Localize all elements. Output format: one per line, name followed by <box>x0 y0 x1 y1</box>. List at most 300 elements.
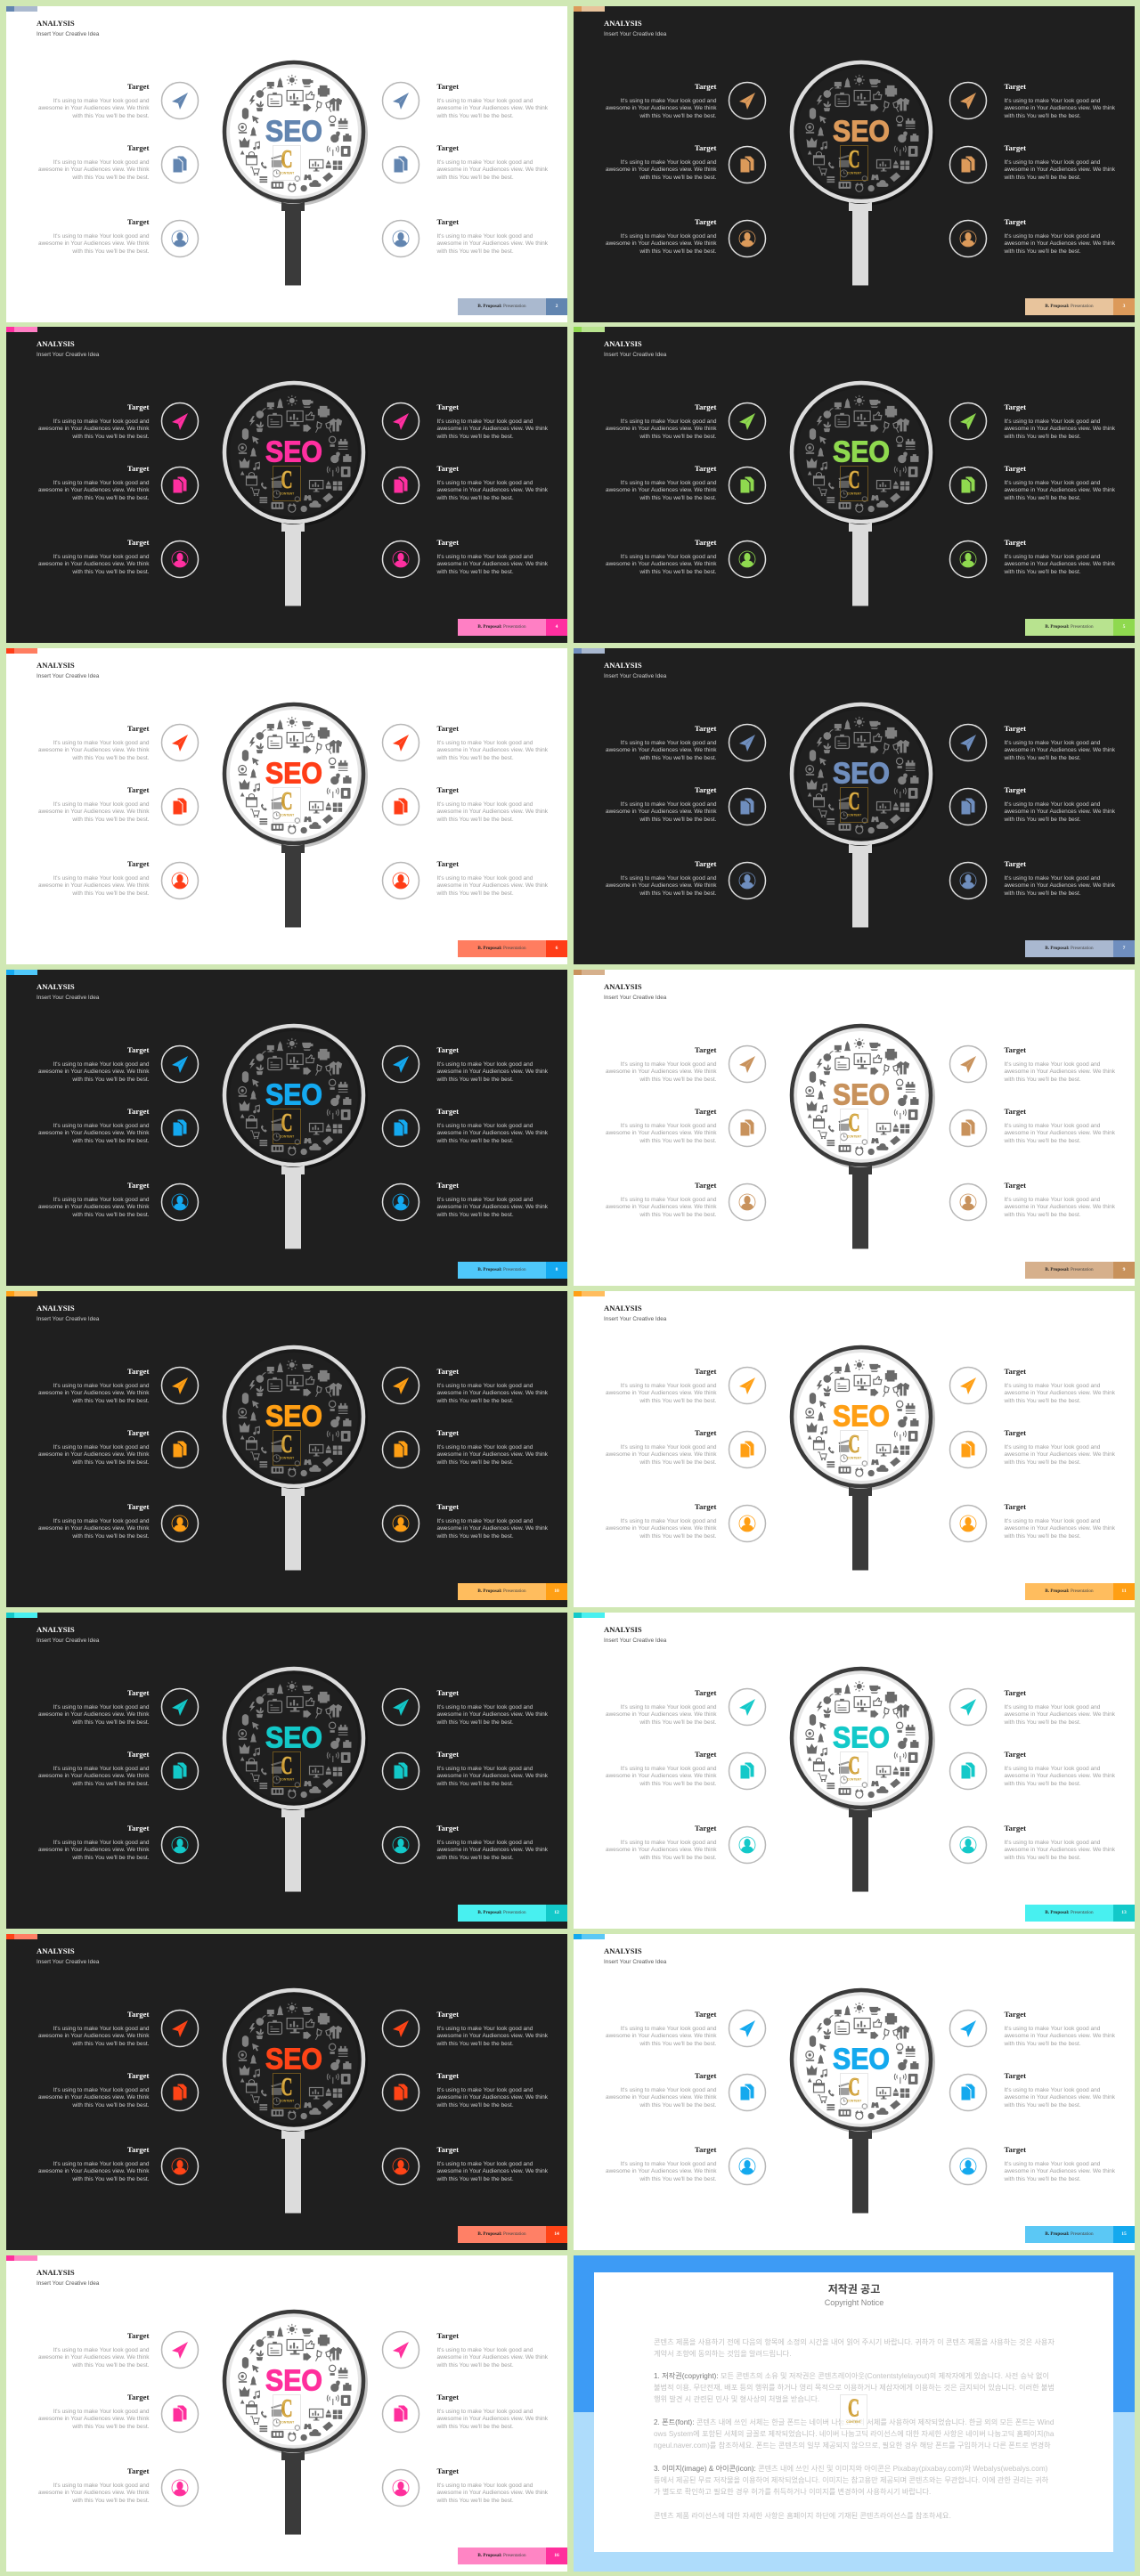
footer: 2 <box>556 304 558 309</box>
text: target left 1: awesome in Your Audiences view. We think <box>38 2033 150 2039</box>
text: target left 2: with this You we'll be the best. <box>72 2102 150 2109</box>
text: target right 2: Target <box>436 2393 459 2401</box>
text: target left 2: with this You we'll be the best. <box>639 495 716 501</box>
text: target left 3 <box>604 858 716 898</box>
heading: ANALYSIS <box>604 1946 642 1955</box>
magnifier with SEO: C <box>281 2395 292 2423</box>
magnifier with SEO: CONTENT <box>280 171 295 175</box>
text: target left 2: with this You we'll be the best. <box>72 1138 150 1144</box>
copyright clause 1: 1. 저작권(copyright): 모든 콘텐츠의 소유 및 저작권은 콘텐츠레이아웃(Contentstylelayout)의 제작자에게 있습니다. 사전 승낙 없이 불법적 이용, 무단전재, 배포 등의 행위를 하거나 영리 목적으로 이용하거나 제삼자에게 이용하는 것은 금지되어 있습니다. 이러한 불법 행위 발견 시 관련된 민사 및 형사상의 처벌을 받습니다. <box>654 2372 1054 2402</box>
icon: plane right <box>380 2329 421 2370</box>
text: target right 1 <box>436 2330 558 2369</box>
panel: slide 7 dark slate <box>574 648 1135 964</box>
text: target right 1: with this You we'll be the best. <box>436 1398 514 1403</box>
text: target right 2 <box>1005 784 1126 824</box>
text: target left 1: awesome in Your Audiences view. We think <box>38 2354 150 2361</box>
text: target right 3 <box>1005 1823 1126 1862</box>
text: target right 1: with this You we'll be the best. <box>1005 2041 1081 2046</box>
text: target left 2: Target <box>695 464 716 473</box>
text: target left 1: with this You we'll be the best. <box>72 2361 150 2369</box>
heading: ANALYSIS <box>604 1304 642 1312</box>
icon: person left <box>159 1503 200 1544</box>
text: target left 2: Target <box>695 2071 716 2080</box>
text: target right 2: with this You we'll be the best. <box>436 2424 514 2430</box>
text: target right 3: with this You we'll be the best. <box>1005 248 1081 255</box>
text: target right 1: It's using to make Your look good and <box>436 98 533 103</box>
text: target right 1 <box>1005 402 1126 441</box>
footer: B. Proposal: Presentation <box>477 304 526 309</box>
text: target right 1 <box>436 723 558 762</box>
text: target right 3: Target <box>436 1502 459 1511</box>
text: target left 1: It's using to make Your look good and <box>53 739 150 746</box>
text: target left 3 <box>37 858 150 898</box>
text: target right 1: Target <box>1005 724 1026 733</box>
text: target left 2: It's using to make Your look good and <box>621 1766 716 1772</box>
text: target right 3: with this You we'll be the best. <box>1005 1533 1081 1539</box>
icon: documents right <box>948 2072 989 2113</box>
magnifier with SEO: SEO <box>265 1077 322 1110</box>
magnifier with SEO: CONTENT <box>280 492 295 495</box>
icon: documents left <box>727 1751 768 1792</box>
text: target left 3: awesome in Your Audiences view. We think <box>606 561 716 567</box>
text: target right 1: awesome in Your Audiences view. We think <box>436 1711 548 1718</box>
text: target left 1 <box>606 82 716 119</box>
icon: plane left <box>159 722 200 763</box>
magnifier with SEO: C <box>848 788 860 816</box>
text: target right 2: with this You we'll be the best. <box>436 817 514 823</box>
footer <box>458 619 567 636</box>
text: target right 1 <box>436 1366 558 1405</box>
text: target left 1: Target <box>695 402 716 411</box>
text: target right 2: It's using to make Your look good and <box>436 1123 533 1129</box>
icon: person right <box>380 2467 421 2508</box>
icon: documents right <box>380 1429 421 1470</box>
text: target left 3: with this You we'll be the best. <box>72 1854 150 1861</box>
text: target left 1: It's using to make Your look good and <box>53 1382 150 1389</box>
text: target right 3: Target <box>1005 217 1026 226</box>
text: target right 1: with this You we'll be the best. <box>1005 433 1081 440</box>
text: target right 3: It's using to make Your look good and <box>436 2160 533 2167</box>
text: target right 3: It's using to make Your look good and <box>436 1517 533 1524</box>
icon: plane left <box>727 722 768 763</box>
icon: documents left <box>729 146 766 183</box>
icon: plane right <box>380 722 421 763</box>
text: target right 2: awesome in Your Audiences view. We think <box>436 1773 548 1779</box>
text: target right 1: awesome in Your Audiences view. We think <box>436 1390 548 1396</box>
footer <box>458 1262 567 1279</box>
text: target right 3: It's using to make Your look good and <box>1005 1840 1100 1845</box>
text: target right 2: Target <box>436 1750 459 1759</box>
text: target right 3: It's using to make Your look good and <box>1005 1197 1100 1202</box>
text: target right 1: with this You we'll be the best. <box>436 1076 514 1083</box>
text: target left 3: Target <box>695 1824 716 1832</box>
text: target left 2 <box>604 2070 716 2109</box>
text: target left 3: awesome in Your Audiences view. We think <box>606 240 716 247</box>
text: target left 1: It's using to make Your look good and <box>621 2025 716 2032</box>
text: target left 2: awesome in Your Audiences view. We think <box>38 1130 150 1136</box>
icon: plane right <box>948 401 989 442</box>
footer: 12 <box>554 1910 559 1915</box>
text: target left 1: It's using to make Your look good and <box>621 739 716 746</box>
text: target left 3: It's using to make Your look good and <box>53 233 150 239</box>
text: target right 2: It's using to make Your look good and <box>436 1766 533 1772</box>
text: target right 2: It's using to make Your look good and <box>436 1444 533 1451</box>
icon: documents right <box>380 2393 421 2434</box>
text: target left 3: Target <box>127 1824 150 1832</box>
magnifier with SEO: SEO <box>265 756 322 789</box>
text: target right 3 <box>1005 217 1115 255</box>
text: target left 1 <box>606 402 716 440</box>
text: target left 3: It's using to make Your look good and <box>621 233 716 239</box>
footer <box>1024 1583 1135 1600</box>
text: target right 1: Target <box>436 1045 459 1054</box>
text: target right 3: awesome in Your Audiences view. We think <box>436 1204 548 1210</box>
text: target right 2: awesome in Your Audiences view. We think <box>1005 809 1115 815</box>
text: target left 3 <box>37 2466 150 2505</box>
text: target right 3: with this You we'll be the best. <box>436 248 514 255</box>
icon: person right <box>380 2146 421 2187</box>
text: target right 2: Target <box>1005 143 1026 152</box>
icon: documents left <box>159 1751 200 1792</box>
text: target left 1: Target <box>695 1367 716 1376</box>
icon: person left <box>727 1182 768 1223</box>
text: target left 1 <box>604 723 716 762</box>
text: target right 3: It's using to make Your look good and <box>436 2483 533 2488</box>
magnifier with SEO <box>223 61 368 285</box>
text: target right 2 <box>436 464 548 501</box>
text: target right 1: Target <box>1005 82 1026 91</box>
text: target right 3: awesome in Your Audiences view. We think <box>1005 561 1115 567</box>
text: target right 1 <box>1005 1366 1126 1405</box>
icon: documents left <box>160 467 200 504</box>
icon: person left <box>159 2467 200 2508</box>
text: target left 1: with this You we'll be the best. <box>72 112 150 119</box>
text: target left 3: awesome in Your Audiences view. We think <box>606 882 716 889</box>
footer: B. Proposal: Presentation <box>477 1589 526 1594</box>
text: target right 1 <box>1005 1687 1126 1727</box>
text: target left 1: awesome in Your Audiences view. We think <box>38 426 150 432</box>
text: target left 2: awesome in Your Audiences view. We think <box>38 167 150 173</box>
text: target right 2: awesome in Your Audiences view. We think <box>436 2416 548 2422</box>
magnifier with SEO <box>784 1341 940 1574</box>
heading: ANALYSIS <box>37 661 75 670</box>
text: target right 1 <box>1005 1044 1126 1084</box>
text: target right 1: with this You we'll be the best. <box>436 2361 514 2369</box>
text: target right 1: Target <box>436 1367 459 1376</box>
text: target right 2: with this You we'll be the best. <box>1005 2102 1081 2109</box>
subtitle: Insert Your Creative Idea <box>37 1959 99 1964</box>
text: target right 1: awesome in Your Audiences view. We think <box>436 747 548 753</box>
icon: plane left <box>159 1686 200 1727</box>
text: target left 1: It's using to make Your look good and <box>53 98 150 103</box>
text: target left 3 <box>38 538 150 575</box>
text: target right 2: It's using to make Your look good and <box>1005 480 1100 486</box>
text: target left 1: with this You we'll be the best. <box>639 433 716 440</box>
text: target right 2: It's using to make Your look good and <box>1005 2087 1100 2093</box>
text: target left 2: It's using to make Your look good and <box>53 1123 150 1129</box>
text: target right 2: with this You we'll be the best. <box>1005 1138 1081 1144</box>
panel: slide 10 dark orange <box>6 1291 567 1607</box>
icon: person right <box>380 1182 421 1223</box>
text: target left 1: Target <box>127 1688 150 1697</box>
text: target right 1: Target <box>436 2010 459 2019</box>
text: target left 2: awesome in Your Audiences view. We think <box>38 809 150 815</box>
panel: slide 12 dark cyan <box>6 1613 567 1929</box>
panel: slide 4 dark pink <box>6 327 567 643</box>
text: target left 3 <box>604 1823 716 1862</box>
panel: slide 8 dark sky blue <box>6 970 567 1286</box>
icon: person right <box>948 1824 989 1865</box>
text: target left 3: with this You we'll be the best. <box>639 1854 716 1861</box>
text: target right 2: It's using to make Your look good and <box>436 159 533 166</box>
text: target right 1: with this You we'll be the best. <box>436 112 514 119</box>
text: target left 2: Target <box>695 1750 716 1759</box>
text: target right 1: awesome in Your Audiences view. We think <box>1005 2033 1115 2039</box>
text: target left 1: Target <box>695 2010 716 2019</box>
icon: documents right <box>381 467 420 504</box>
footer <box>1024 1262 1135 1279</box>
text: target right 3: awesome in Your Audiences view. We think <box>436 1525 548 1532</box>
text: target left 1 <box>604 2009 716 2048</box>
text: target left 2: awesome in Your Audiences view. We think <box>38 487 150 493</box>
text: target right 1: Target <box>1005 1688 1026 1697</box>
text: target right 3: awesome in Your Audiences view. We think <box>1005 1847 1115 1853</box>
text: target left 1: with this You we'll be the best. <box>72 1076 150 1083</box>
text: target right 3: awesome in Your Audiences view. We think <box>1005 2168 1115 2174</box>
text: target left 3: It's using to make Your look good and <box>621 1197 716 1202</box>
text: target right 2: with this You we'll be the best. <box>1005 1459 1081 1466</box>
text: target right 2: awesome in Your Audiences view. We think <box>436 1130 548 1136</box>
panel: slide 2 white slate <box>6 6 567 322</box>
text: target left 3: Target <box>127 2145 150 2154</box>
copyright title: 저작권 공고 <box>828 2283 880 2296</box>
text: target left 2: Target <box>695 143 716 152</box>
text: target right 2: It's using to make Your look good and <box>436 480 533 486</box>
icon: plane left <box>159 2008 200 2049</box>
magnifier with SEO: CONTENT <box>847 2100 862 2103</box>
text: target left 2 <box>604 784 716 824</box>
heading: ANALYSIS <box>37 19 75 28</box>
icon: documents right <box>948 1108 989 1149</box>
tab <box>6 327 37 332</box>
text: target left 3: Target <box>695 1502 716 1511</box>
text: target right 2 <box>1005 1106 1126 1145</box>
text: target left 2: awesome in Your Audiences view. We think <box>606 487 716 493</box>
footer <box>458 2226 567 2243</box>
text: target left 2: Target <box>695 785 716 794</box>
text: target left 1 <box>38 82 150 119</box>
text: target left 2: Target <box>127 1750 150 1759</box>
text: target right 1 <box>1005 723 1126 762</box>
text: target left 2: Target <box>127 2393 150 2401</box>
footer: 3 <box>1123 304 1125 309</box>
text: target left 3: with this You we'll be the best. <box>639 1211 716 1218</box>
text: target left 2: with this You we'll be the best. <box>639 1138 716 1144</box>
text: target right 2: It's using to make Your look good and <box>1005 1444 1100 1451</box>
text: target right 2: Target <box>436 1107 459 1116</box>
text: target left 3: awesome in Your Audiences view. We think <box>606 1525 716 1532</box>
text: target right 3 <box>436 1501 558 1540</box>
subtitle: Insert Your Creative Idea <box>37 1637 99 1644</box>
icon: plane right <box>380 2008 421 2049</box>
watermark logo: CONTENT <box>846 2420 861 2424</box>
text: target right 1: It's using to make Your look good and <box>436 2347 533 2353</box>
panel: slide 13 white cyan <box>574 1613 1135 1929</box>
text: target left 3: with this You we'll be the best. <box>639 248 716 255</box>
magnifier with SEO: SEO <box>833 2042 890 2075</box>
magnifier with SEO <box>223 381 368 605</box>
text: target right 2: awesome in Your Audiences view. We think <box>1005 1130 1115 1136</box>
magnifier with SEO: SEO <box>265 2042 322 2075</box>
text: target left 1: It's using to make Your look good and <box>53 2025 150 2032</box>
text: target right 3: with this You we'll be the best. <box>1005 890 1081 896</box>
text: target left 1: Target <box>695 1688 716 1697</box>
magnifier with SEO: CONTENT <box>280 2100 295 2103</box>
text: target right 2: It's using to make Your look good and <box>1005 1123 1100 1129</box>
tab <box>574 327 604 332</box>
icon: plane left <box>727 1686 768 1727</box>
tab <box>574 1934 604 1939</box>
text: target left 3: with this You we'll be the best. <box>72 2497 150 2504</box>
text: target right 1 <box>436 1687 558 1727</box>
magnifier with SEO: SEO <box>265 1720 322 1753</box>
icon: person right <box>948 1503 989 1544</box>
text: target left 2 <box>37 1106 150 1145</box>
subtitle: Insert Your Creative Idea <box>37 1316 99 1321</box>
text: target right 3 <box>436 217 548 255</box>
icon: documents right <box>948 465 989 506</box>
panel: slide 3 dark tan <box>574 6 1135 322</box>
text: target right 1: It's using to make Your look good and <box>436 1704 533 1710</box>
text: target left 1: with this You we'll be the best. <box>639 2041 716 2046</box>
text: target left 3: It's using to make Your look good and <box>53 2483 150 2488</box>
text: target right 2: Target <box>1005 2071 1026 2080</box>
text: target right 1: It's using to make Your look good and <box>1005 1382 1100 1389</box>
text: target right 3 <box>436 538 548 575</box>
heading: ANALYSIS <box>37 1304 75 1312</box>
text: target right 2: awesome in Your Audiences view. We think <box>436 167 548 173</box>
icon: person left <box>727 2146 768 2187</box>
magnifier with SEO: CONTENT <box>847 171 862 175</box>
text: target left 2: with this You we'll be the best. <box>72 1459 150 1466</box>
text: target right 1: It's using to make Your look good and <box>436 2025 533 2032</box>
text: target right 2: Target <box>1005 1750 1026 1759</box>
text: target right 3: with this You we'll be the best. <box>436 890 514 896</box>
subtitle: Insert Your Creative Idea <box>604 351 666 358</box>
tab <box>574 648 604 654</box>
magnifier with SEO: SEO <box>833 756 890 789</box>
icon: documents left <box>159 2393 200 2434</box>
text: target right 2: It's using to make Your look good and <box>1005 801 1100 808</box>
footer <box>1024 298 1135 315</box>
magnifier with SEO: CONTENT <box>847 1134 862 1138</box>
icon: documents right <box>380 1108 421 1149</box>
text: target right 2: Target <box>436 2071 459 2080</box>
heading: ANALYSIS <box>604 339 642 348</box>
text: target right 1: Target <box>1005 1045 1026 1054</box>
footer: B. Proposal: Presentation <box>477 1267 526 1272</box>
text: target left 2: Target <box>127 785 150 794</box>
text: target right 3: awesome in Your Audiences view. We think <box>436 561 548 567</box>
text: target right 2: It's using to make Your look good and <box>436 2087 533 2093</box>
footer <box>458 298 567 315</box>
text: target right 3 <box>1005 1180 1126 1219</box>
text: target left 2: Target <box>127 143 150 152</box>
text: target right 3: with this You we'll be the best. <box>436 568 514 575</box>
heading: ANALYSIS <box>37 339 75 348</box>
text: target right 2 <box>436 2392 558 2431</box>
footer <box>458 940 567 957</box>
text: target right 1: awesome in Your Audiences view. We think <box>436 105 548 111</box>
icon: plane left <box>159 1044 200 1085</box>
text: target right 3: with this You we'll be the best. <box>1005 568 1081 575</box>
text: target right 2: awesome in Your Audiences view. We think <box>436 487 548 493</box>
text: target left 3: with this You we'll be the best. <box>639 1533 716 1539</box>
text: target left 2: with this You we'll be the best. <box>639 175 716 181</box>
footer: B. Proposal: Presentation <box>1045 1267 1094 1272</box>
text: target left 2 <box>37 1427 150 1467</box>
text: target left 3 <box>37 1180 150 1219</box>
text: target left 1: awesome in Your Audiences view. We think <box>38 747 150 753</box>
text: target right 3 <box>436 858 558 898</box>
icon: person left <box>729 219 766 258</box>
text: target left 2: with this You we'll be the best. <box>639 1459 716 1466</box>
text: target left 3: with this You we'll be the best. <box>72 568 150 575</box>
text: target right 1: awesome in Your Audiences view. We think <box>436 1069 548 1075</box>
icon: person right <box>380 1503 421 1544</box>
text: target right 2: awesome in Your Audiences view. We think <box>1005 2094 1115 2101</box>
text: target left 2: with this You we'll be the best. <box>72 817 150 823</box>
text: target right 1: with this You we'll be the best. <box>1005 755 1081 760</box>
text: target left 1: awesome in Your Audiences view. We think <box>38 1390 150 1396</box>
text: target right 1: Target <box>1005 1367 1026 1376</box>
text: target left 1: with this You we'll be the best. <box>72 2041 150 2046</box>
text: target right 2: awesome in Your Audiences view. We think <box>1005 1451 1115 1458</box>
text: target right 3: Target <box>1005 2145 1026 2154</box>
text: target right 1: with this You we'll be the best. <box>436 755 514 760</box>
text: target right 3: with this You we'll be the best. <box>436 2497 514 2504</box>
text: target left 3 <box>604 1501 716 1540</box>
magnifier with SEO: SEO <box>265 1399 322 1432</box>
magnifier with SEO: CONTENT <box>280 1457 295 1460</box>
heading: ANALYSIS <box>37 1946 75 1955</box>
icon: documents right <box>948 1429 989 1470</box>
text: target left 1: Target <box>127 724 150 733</box>
text: target right 1: awesome in Your Audiences view. We think <box>436 426 548 432</box>
magnifier with SEO: C <box>281 1752 292 1780</box>
tab <box>574 6 604 12</box>
footer: 11 <box>1121 1589 1127 1594</box>
text: target right 3: Target <box>436 1824 459 1832</box>
text: target left 3: awesome in Your Audiences view. We think <box>606 1847 716 1853</box>
text: target right 2: Target <box>436 785 459 794</box>
text: target left 1 <box>37 1044 150 1084</box>
text: target left 2 <box>37 2070 150 2109</box>
text: target left 1: with this You we'll be the best. <box>639 1076 716 1083</box>
text: target right 2: awesome in Your Audiences view. We think <box>436 1451 548 1458</box>
text: target left 1: with this You we'll be the best. <box>72 1398 150 1403</box>
icon: plane left <box>729 82 766 119</box>
text: target left 3: Target <box>127 2466 150 2475</box>
text: target left 1: It's using to make Your look good and <box>53 418 150 424</box>
footer: 6 <box>556 946 558 951</box>
magnifier with SEO <box>216 698 373 931</box>
text: target left 1 <box>37 2330 150 2369</box>
icon: documents left <box>727 465 768 506</box>
text: target right 2: with this You we'll be the best. <box>436 1459 514 1466</box>
text: target left 2: with this You we'll be the best. <box>72 1781 150 1787</box>
icon: documents right <box>380 1751 421 1792</box>
